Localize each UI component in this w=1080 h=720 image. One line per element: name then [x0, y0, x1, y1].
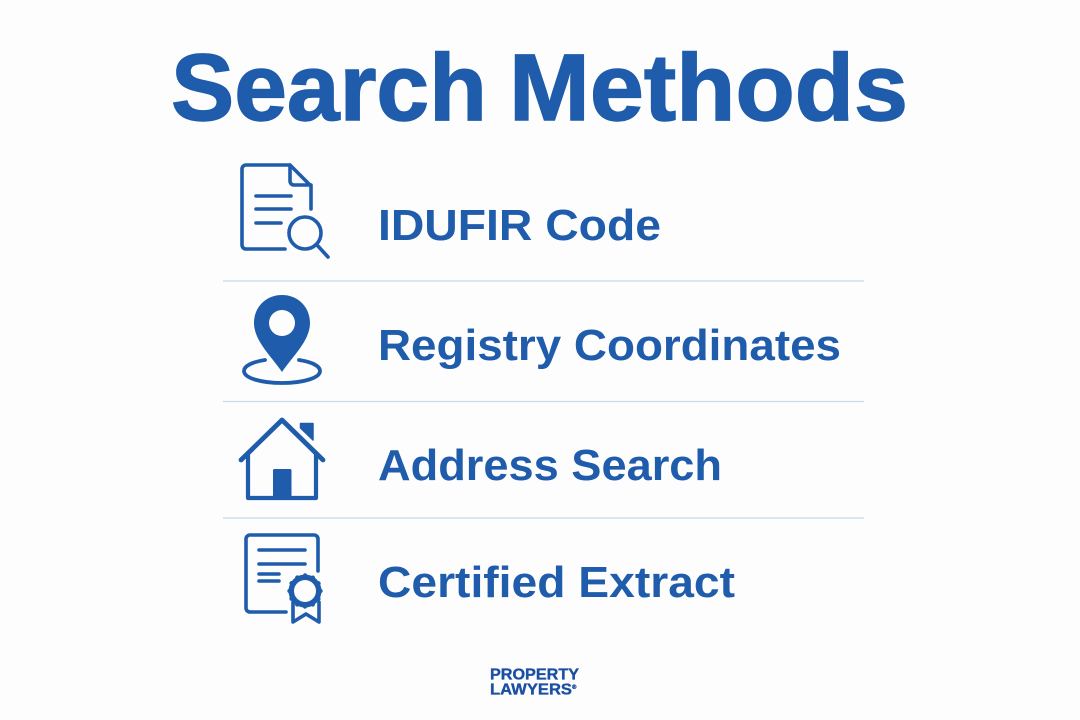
logo: Property Lawyers: PROPERTY — [490, 666, 580, 684]
logo: Property Lawyers — [490, 666, 580, 698]
logo: Property Lawyers: LAWYERS — [490, 682, 572, 698]
label: Certified Extract: Certified Extract — [378, 558, 735, 607]
label: IDUFIR Code: IDUFIR Code — [378, 201, 661, 250]
icon: location pin — [244, 295, 320, 383]
label: Registry Coordinates: Registry Coordinates — [378, 321, 841, 370]
icon: document with magnifier — [242, 165, 328, 257]
icon: house — [241, 420, 323, 498]
logo: Property Lawyers: ® — [572, 684, 577, 691]
icon: certificate with seal — [246, 535, 322, 622]
label: Address Search: Address Search — [378, 441, 722, 490]
title — [171, 35, 908, 141]
title: Methods — [509, 35, 908, 141]
title: Search — [171, 35, 487, 141]
